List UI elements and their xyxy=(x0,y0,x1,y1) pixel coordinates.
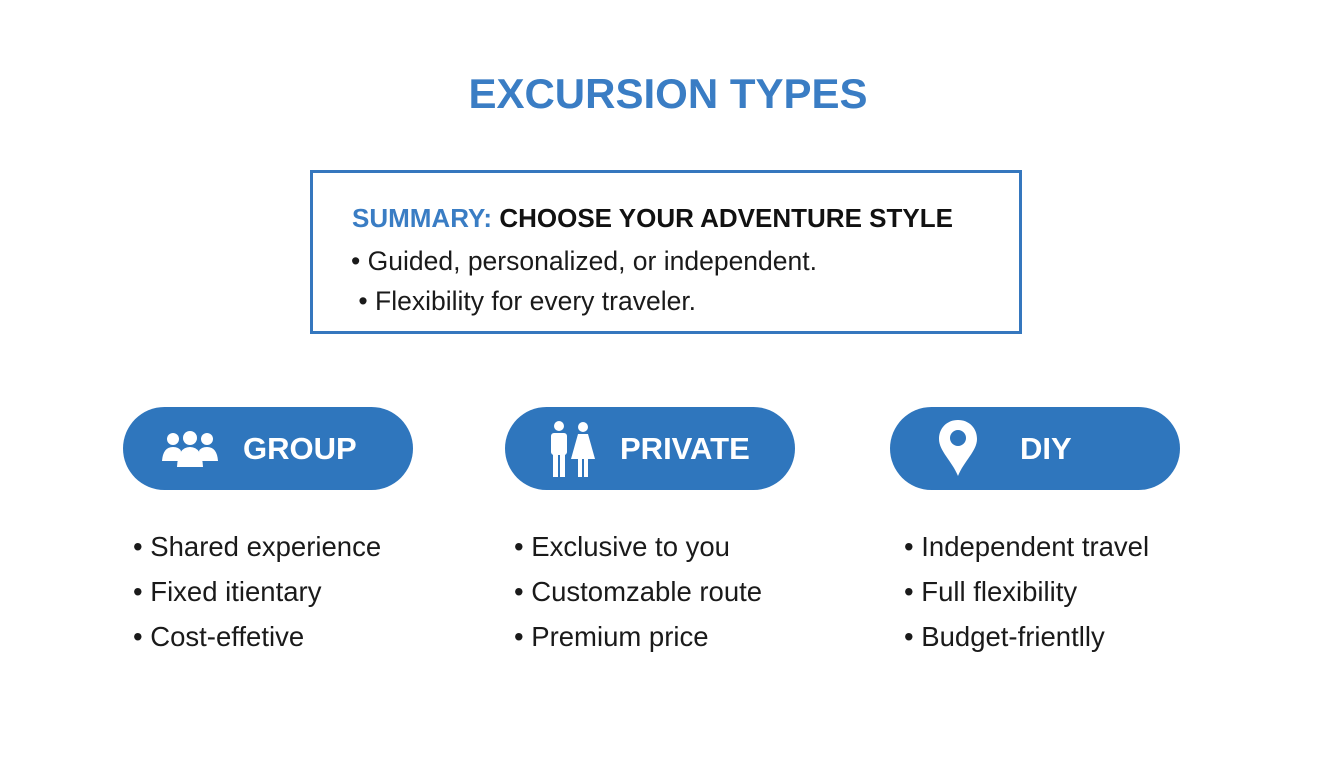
pill: private xyxy=(505,407,795,490)
summary bullets xyxy=(351,246,817,316)
summary heading: SUMMARY: CHOOSE YOUR ADVENTURE STYLE xyxy=(352,203,953,233)
pill: diy xyxy=(890,407,1180,490)
icon: map pin xyxy=(939,420,977,476)
icon: group xyxy=(162,431,218,467)
panel: summary xyxy=(310,170,1022,334)
pill: group: GROUP xyxy=(243,431,357,466)
icon: couple xyxy=(551,421,595,477)
list: group: • Shared experience xyxy=(133,531,381,562)
list: private xyxy=(514,531,762,652)
summary bullets: • Flexibility for every traveler. xyxy=(358,286,696,316)
pill: group xyxy=(123,407,413,490)
list: diy: • Budget-frientlly xyxy=(904,621,1105,652)
list: diy: • Independent travel xyxy=(904,531,1149,562)
summary bullets: • Guided, personalized, or independent. xyxy=(351,246,817,276)
list: group: • Cost-effetive xyxy=(133,621,304,652)
list: group: • Fixed itientary xyxy=(133,576,321,607)
pill: diy: DIY xyxy=(1020,431,1072,466)
list: private: • Customzable route xyxy=(514,576,762,607)
title: EXCURSION TYPES xyxy=(468,70,868,117)
list: diy: • Full flexibility xyxy=(904,576,1077,607)
list: diy xyxy=(904,531,1149,652)
pill: private: PRIVATE xyxy=(620,431,750,466)
list: group xyxy=(133,531,381,652)
list: private: • Premium price xyxy=(514,621,709,652)
list: private: • Exclusive to you xyxy=(514,531,730,562)
